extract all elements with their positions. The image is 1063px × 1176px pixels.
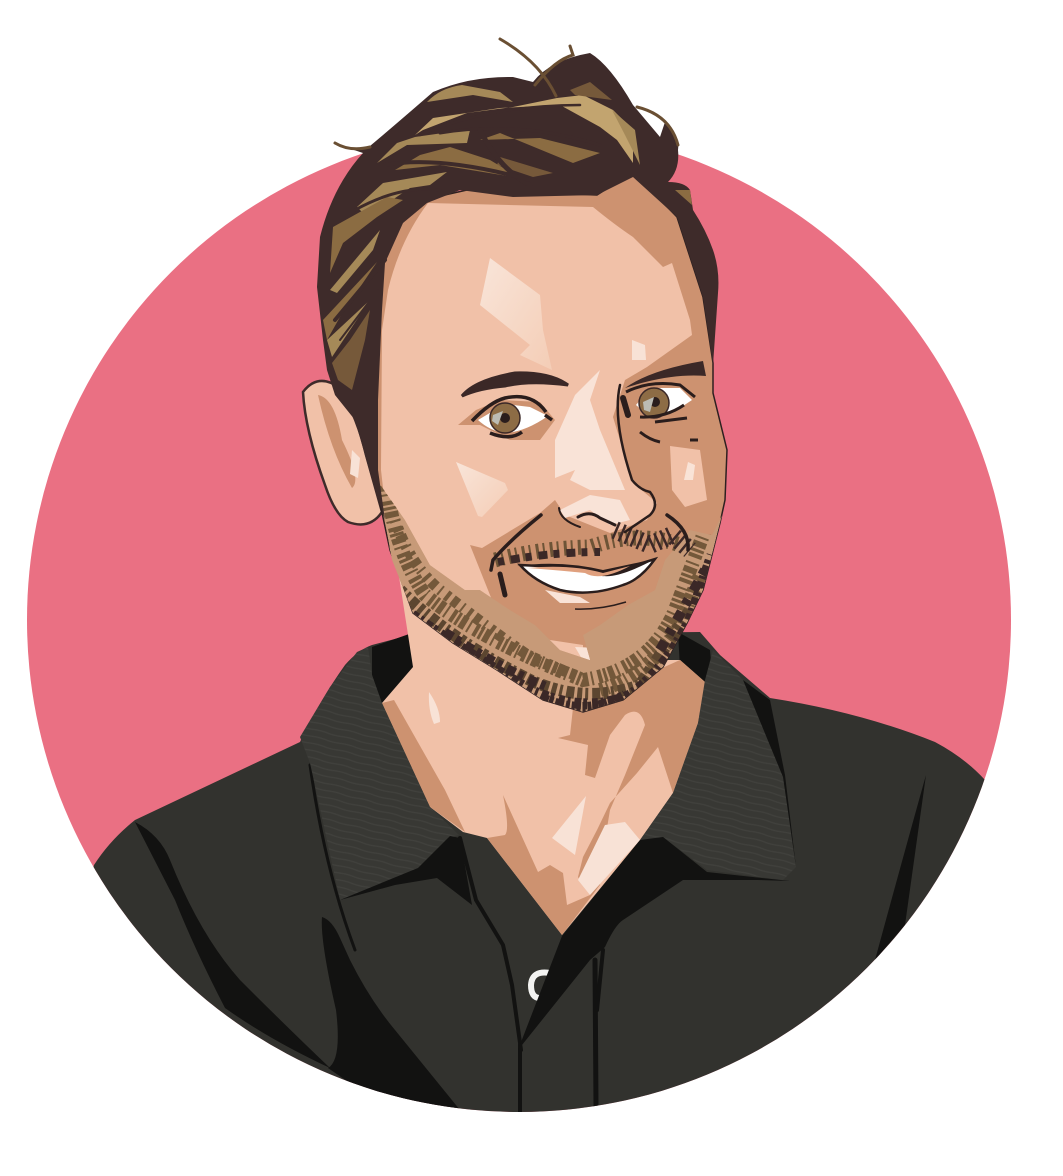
hair light strands xyxy=(323,82,692,390)
under-lip highlight xyxy=(545,590,590,603)
ear shape xyxy=(303,381,382,524)
neck shading xyxy=(382,660,705,935)
hair dark strands xyxy=(335,105,600,340)
left collar xyxy=(300,647,459,900)
beard xyxy=(377,480,722,712)
beard stubble, brown xyxy=(386,480,705,680)
right cheek highlight xyxy=(670,446,707,507)
nose outline and smile lines xyxy=(491,385,688,595)
placket lines xyxy=(310,765,603,1112)
teeth xyxy=(520,559,655,593)
face base shadow xyxy=(370,172,727,712)
nose highlight xyxy=(555,370,625,490)
left iris xyxy=(490,403,520,433)
shirt xyxy=(94,578,984,1112)
upper lip xyxy=(517,559,655,576)
hair silhouette xyxy=(317,53,718,520)
ear xyxy=(303,381,382,524)
inner ear xyxy=(318,395,355,488)
right iris xyxy=(639,388,669,418)
hair xyxy=(317,39,718,520)
neck shadow behind collar xyxy=(372,632,712,705)
beard base xyxy=(377,480,722,712)
shirt folds xyxy=(135,680,926,1110)
neck highlights xyxy=(429,692,640,895)
left eyebrow xyxy=(462,373,568,396)
beard stubble, dark xyxy=(412,555,712,704)
forehead highlight xyxy=(480,258,552,370)
flyaway strands xyxy=(335,39,678,149)
right eye xyxy=(623,361,706,442)
left eye xyxy=(458,373,568,440)
left eye white xyxy=(478,404,548,433)
right eye white xyxy=(636,388,692,417)
cheek highlight xyxy=(456,462,508,517)
light skin xyxy=(381,203,692,700)
pink background circle xyxy=(27,128,1011,1112)
face xyxy=(370,172,727,712)
neck xyxy=(382,570,705,935)
right eyelid lines xyxy=(626,384,698,442)
left eye socket shadow xyxy=(458,400,555,440)
left eyelid lines xyxy=(472,397,552,437)
button xyxy=(531,972,550,998)
lip line xyxy=(575,602,626,609)
right collar xyxy=(640,650,796,880)
mouth xyxy=(517,559,655,609)
moustache xyxy=(495,538,680,560)
collar shadows xyxy=(340,836,790,1050)
shirt body xyxy=(94,632,984,1112)
right eyebrow xyxy=(625,361,706,388)
